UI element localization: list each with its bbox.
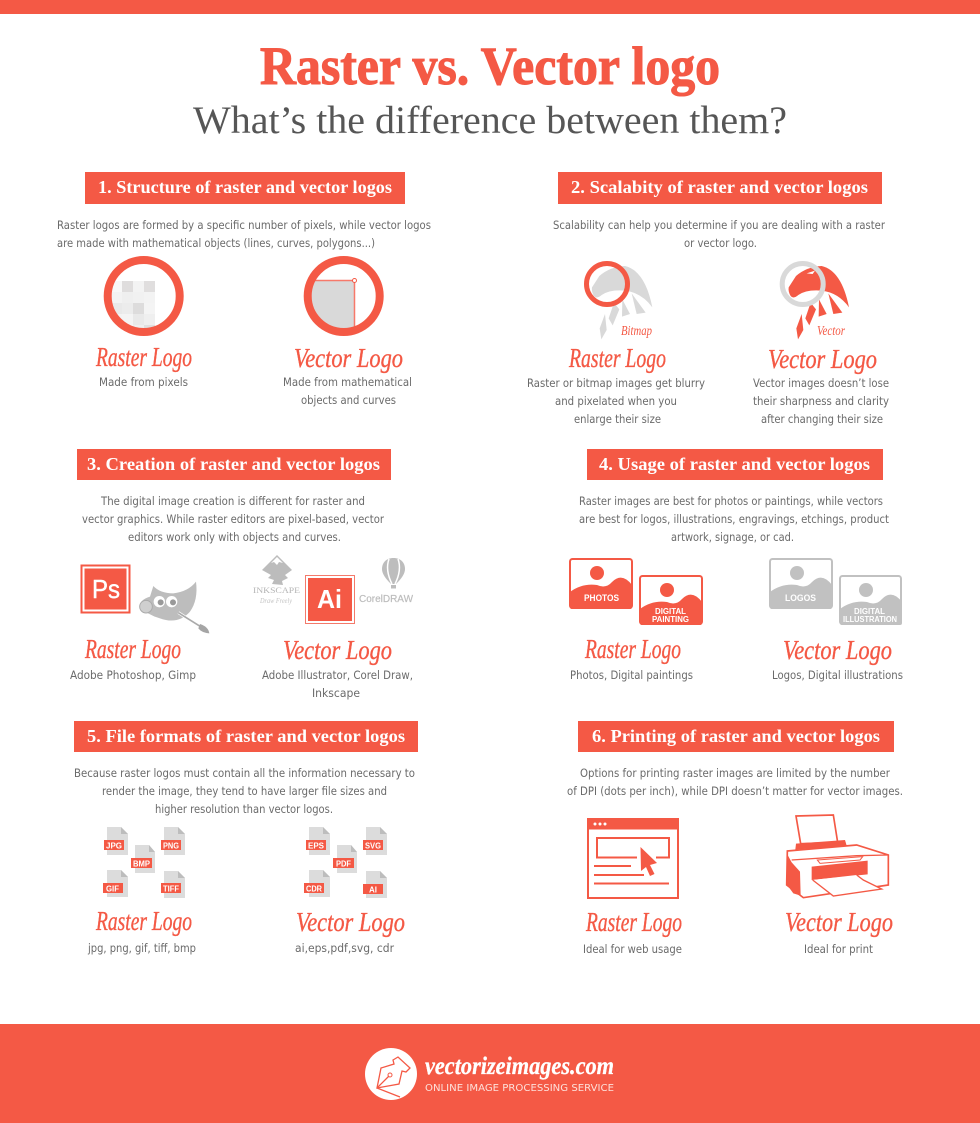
intro text: scalability	[553, 218, 885, 250]
icon: logos	[770, 559, 832, 609]
intro text: scalability: or vector logo.	[684, 236, 757, 250]
intro text: usage: are best for logos, illustrations, engravings, etchings, product	[579, 512, 889, 526]
label: raster logo: Raster Logo	[568, 343, 666, 373]
icon: vector file formats: PDF	[336, 860, 351, 868]
icon: adobe illustrator: Ai	[317, 584, 342, 614]
icon: inkscape: INKSCAPE	[253, 585, 300, 595]
icon: photos	[570, 559, 632, 609]
label: vector logo: Vector Logo	[296, 907, 405, 937]
intro text: structure: are made with mathematical objects (lines, curves, polygons...)	[57, 236, 375, 250]
caption: raster: Adobe Photoshop, Gimp	[70, 668, 196, 682]
icon: gimp	[140, 582, 209, 633]
icon: vector file formats	[304, 827, 387, 898]
subtitle: What’s the difference between them?	[193, 99, 787, 142]
icon: logos: LOGOS	[785, 593, 816, 603]
icon: vector bird	[782, 264, 849, 339]
title: Raster vs. Vector logo	[260, 36, 720, 96]
top bar	[0, 0, 980, 14]
caption: vector: Inkscape	[312, 686, 360, 700]
icon: raster file formats: GIF	[106, 884, 119, 894]
heading: file formats: 5. File formats of raster and vector logos	[87, 726, 405, 746]
heading: scalability: 2. Scalabity of raster and vector logos	[571, 177, 868, 197]
icon: raster file formats	[103, 827, 185, 898]
intro text: creation	[82, 494, 384, 544]
icon: pen nib logo	[365, 1048, 417, 1100]
caption: vector	[262, 668, 413, 700]
label: raster logo: Raster Logo	[584, 634, 681, 664]
caption: raster: jpg, png, gif, tiff, bmp	[87, 941, 196, 955]
intro text: file formats: higher resolution than vector logos.	[155, 802, 333, 816]
caption: vector: Made from mathematical	[283, 375, 412, 389]
panel: scalability	[527, 172, 889, 426]
icon: coreldraw: CorelDRAW	[359, 593, 413, 605]
icon: inkscape: Draw Freely	[259, 597, 293, 605]
intro text: structure	[57, 218, 431, 250]
intro text: usage: Raster images are best for photos or paintings, while vectors	[579, 494, 883, 508]
intro text: creation: editors work only with objects and curves.	[128, 530, 341, 544]
label: vector logo: Vector Logo	[768, 344, 877, 374]
icon: coreldraw	[359, 558, 413, 605]
caption: vector: their sharpness and clarity	[753, 394, 889, 408]
intro text: file formats: render the image, they tend to have larger file sizes and	[102, 784, 387, 798]
icon: vector file formats: EPS	[308, 842, 325, 850]
icon: digital painting: PAINTING	[652, 615, 689, 624]
intro text: structure: Raster logos are formed by a specific number of pixels, while vector logos	[57, 218, 431, 232]
caption: raster: Made from pixels	[99, 375, 188, 389]
panel: usage	[570, 449, 903, 682]
icon label: bitmap: Bitmap	[621, 324, 652, 339]
caption: vector	[753, 376, 889, 426]
intro text: scalability: Scalability can help you determine if you are dealing with a raster	[553, 218, 885, 232]
icon: digital illustration: DIGITAL	[854, 607, 885, 616]
heading: scalability	[558, 172, 882, 204]
intro text: usage: artwork, signage, or cad.	[671, 530, 794, 544]
heading: creation: 3. Creation of raster and vector logos	[87, 454, 380, 474]
icon: printer	[787, 815, 888, 898]
label: raster logo: Raster Logo	[95, 906, 192, 936]
label: vector logo: Vector Logo	[783, 635, 892, 665]
icon: photoshop: Ps	[92, 574, 120, 604]
icon: photos: PHOTOS	[584, 593, 619, 603]
icon: bitmap bird	[586, 264, 652, 339]
icon: raster file formats: PNG	[163, 842, 179, 850]
caption: raster	[527, 376, 705, 426]
icon: vector file formats: AI	[369, 886, 377, 894]
icon: browser window	[587, 818, 679, 898]
caption: vector: objects and curves	[301, 393, 396, 407]
caption: vector: Ideal for print	[804, 942, 873, 956]
icon: digital painting: DIGITAL	[655, 607, 686, 616]
caption: raster: and pixelated when you	[555, 394, 677, 408]
icon: raster file formats: TIFF	[163, 884, 179, 894]
caption: vector	[283, 375, 412, 407]
caption: vector: Adobe Illustrator, Corel Draw,	[262, 668, 413, 682]
heading: creation	[77, 449, 391, 480]
caption: raster: enlarge their size	[574, 412, 661, 426]
icon: vector circle	[305, 260, 380, 336]
heading: usage	[587, 449, 883, 480]
panel: file formats	[74, 721, 418, 955]
icon: photoshop	[82, 566, 130, 612]
caption: raster: Ideal for web usage	[583, 942, 682, 956]
icon: digital painting	[640, 576, 702, 625]
intro text: printing: of DPI (dots per inch), while DPI doesn’t matter for vector images.	[567, 784, 903, 798]
label: raster logo: Raster Logo	[585, 907, 682, 937]
panel: structure	[57, 172, 431, 407]
label: vector logo: Vector Logo	[283, 635, 392, 665]
caption: vector: Logos, Digital illustrations	[772, 668, 903, 682]
icon: adobe illustrator	[306, 576, 354, 624]
intro text: usage	[579, 494, 889, 544]
brand tagline: ONLINE IMAGE PROCESSING SERVICE	[425, 1083, 614, 1094]
caption: raster: Photos, Digital paintings	[570, 668, 693, 682]
icon label: vector: Vector	[817, 324, 845, 339]
icon: inkscape	[253, 555, 300, 605]
heading: printing: 6. Printing of raster and vector logos	[592, 726, 880, 746]
heading: structure: 1. Structure of raster and vector logos	[98, 177, 392, 197]
heading: usage: 4. Usage of raster and vector logos	[599, 454, 870, 474]
label: vector logo: Vector Logo	[294, 343, 403, 373]
intro text: creation: vector graphics. While raster editors are pixel-based, vector	[82, 512, 384, 526]
panel: creation	[70, 449, 413, 700]
icon: vector file formats: SVG	[365, 842, 381, 850]
icon: digital illustration	[840, 576, 902, 625]
icon: digital illustration: ILLUSTRATION	[843, 615, 897, 624]
caption: vector: after changing their size	[761, 412, 883, 426]
heading: file formats	[74, 721, 418, 752]
intro text: file formats	[74, 766, 415, 816]
footer band	[0, 1024, 980, 1123]
caption: vector: Vector images doesn’t lose	[753, 376, 889, 390]
intro text: file formats: Because raster logos must contain all the information necessary to	[74, 766, 415, 780]
icon: raster file formats: JPG	[106, 842, 122, 850]
heading: structure	[85, 172, 405, 204]
icon: pixel circle	[108, 260, 180, 336]
caption: raster: Raster or bitmap images get blurry	[527, 376, 705, 390]
intro text: printing: Options for printing raster images are limited by the number	[580, 766, 890, 780]
heading: printing	[578, 721, 894, 752]
label: vector logo: Vector Logo	[785, 907, 893, 937]
panel: printing	[567, 721, 903, 956]
brand name: vectorizeimages.com	[425, 1053, 614, 1080]
label: raster logo: Raster Logo	[84, 634, 181, 664]
caption: vector: ai,eps,pdf,svg, cdr	[295, 941, 394, 955]
label: raster logo: Raster Logo	[95, 342, 192, 372]
intro text: printing	[567, 766, 903, 798]
icon: raster file formats: BMP	[133, 860, 151, 868]
intro text: creation: The digital image creation is different for raster and	[100, 494, 365, 508]
icon: vector file formats: CDR	[306, 884, 322, 894]
